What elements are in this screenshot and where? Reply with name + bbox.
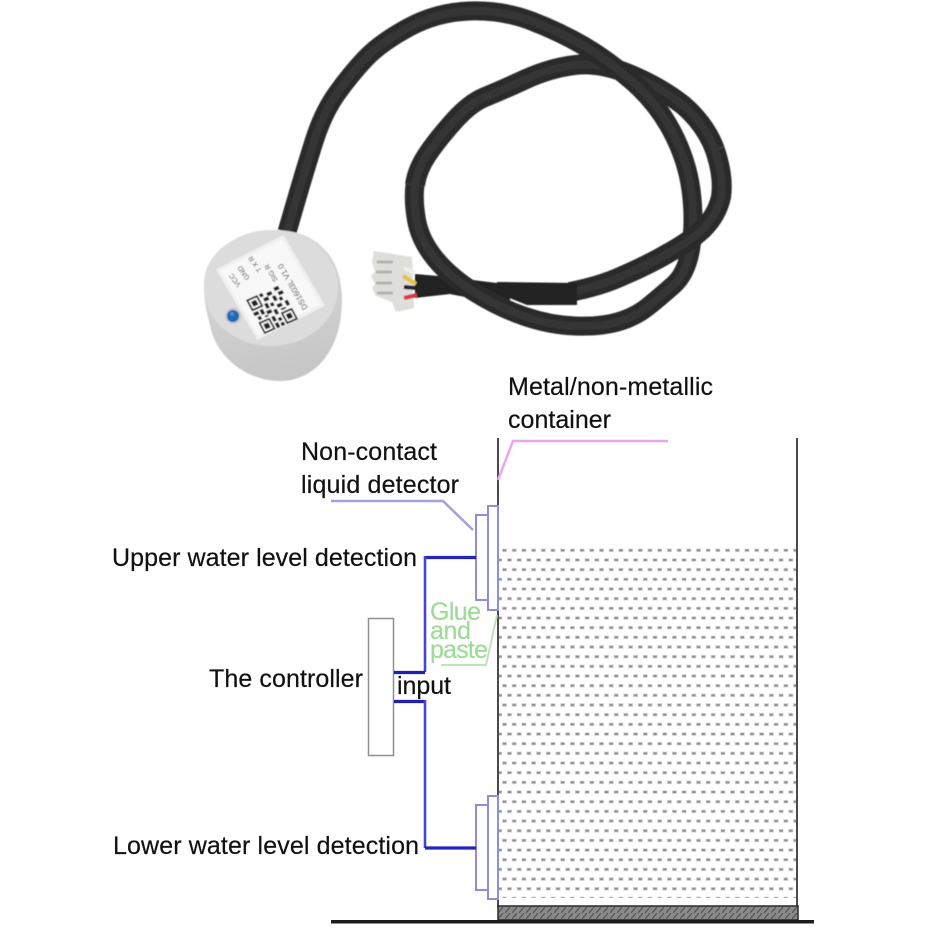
heat-shrink sleeve xyxy=(497,282,577,305)
label text xyxy=(228,254,310,312)
connector xyxy=(371,251,417,312)
thin wrap from sleeve to connector xyxy=(415,274,510,305)
label text: SIG R xyxy=(264,262,280,282)
label: non-contact liquid detector: Non-contact xyxy=(301,438,437,466)
label: input: input xyxy=(397,672,451,700)
callout line: container xyxy=(498,441,668,480)
cable: main strand from sensor around the loop xyxy=(287,11,693,326)
label text: VCC xyxy=(228,272,243,288)
wiring: upper detector to controller xyxy=(394,556,476,672)
label: glue and paste: Glue xyxy=(430,598,481,626)
cable: outer strand, over the crossing xyxy=(570,150,722,292)
sensor label xyxy=(218,237,323,338)
water xyxy=(499,548,796,898)
product photo: sensor with cable xyxy=(204,11,722,381)
sensor body xyxy=(204,230,342,381)
QR code xyxy=(246,285,298,334)
label: non-contact liquid detector xyxy=(301,438,459,499)
container base xyxy=(498,906,798,920)
label: glue and paste: paste xyxy=(430,636,488,664)
controller box xyxy=(368,618,394,756)
label text: DS1603L V1.0 xyxy=(276,262,310,312)
LED indicator xyxy=(225,308,241,324)
cable: upper-left strand, passing behind xyxy=(415,64,715,185)
label: non-contact liquid detector: liquid detector xyxy=(301,471,459,499)
diagram: container and water xyxy=(331,438,814,924)
label: glue and paste xyxy=(430,598,488,664)
label: container: Metal/non-metallic xyxy=(508,373,713,401)
upper level detector xyxy=(476,506,498,610)
label: container: container xyxy=(508,406,611,434)
label: lower water level detection: Lower water level detection xyxy=(113,832,419,860)
wiring: lower detector to controller xyxy=(394,700,476,848)
callout line: detector xyxy=(331,501,473,530)
label: glue and paste: and xyxy=(430,617,471,645)
floor line xyxy=(331,920,814,924)
label text: T X R xyxy=(248,254,264,273)
container walls xyxy=(498,438,797,907)
label: upper water level detection: Upper water level detection xyxy=(112,544,417,572)
label: the controller: The controller xyxy=(209,665,363,693)
label: container xyxy=(508,373,713,434)
callout line: glue xyxy=(441,615,497,665)
label text: GND xyxy=(237,264,252,281)
lower level detector xyxy=(476,796,498,899)
